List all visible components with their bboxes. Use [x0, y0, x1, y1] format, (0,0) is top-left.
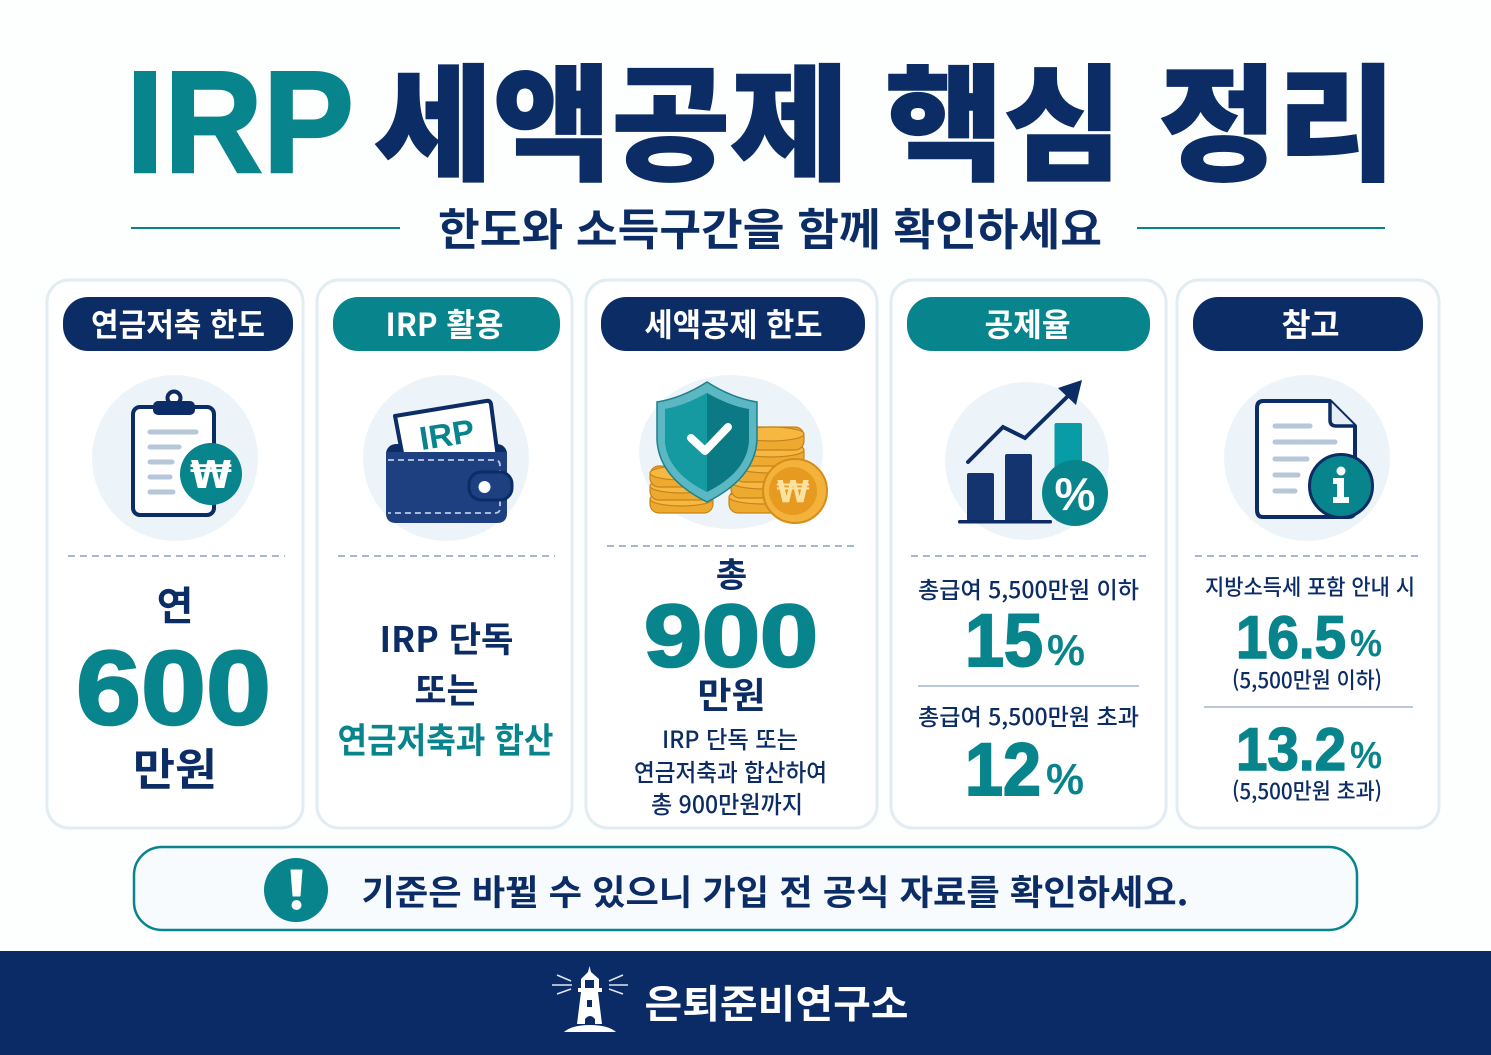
heading pill: 참고 — [1282, 300, 1340, 346]
value: 총 900 만원 — [644, 548, 818, 719]
panel: 연금저축 한도 — [47, 280, 303, 828]
panel: IRP 활용 — [317, 280, 572, 828]
coin stack: left — [650, 466, 713, 513]
panel: 참고 — [1177, 280, 1439, 828]
rate: 16.5%: 지방소득세 포함 안내 시 — [1205, 570, 1415, 602]
heading pill: 세액공제 한도 — [644, 300, 822, 346]
heading pill — [1193, 297, 1423, 351]
rate: 13.2%: 13.2 — [1236, 716, 1346, 783]
rate: 5,500만원 초과 12%: % — [1046, 755, 1084, 804]
title: IRP — [126, 41, 354, 203]
value: 연 600 만원: 연 — [157, 574, 193, 632]
heading pill — [601, 297, 865, 351]
rate: 13.2%: % — [1350, 735, 1382, 777]
callout: notice: 기준은 바뀔 수 있으니 가입 전 공식 자료를 확인하세요. — [362, 865, 1188, 916]
value: 총 900 만원: 만원 — [698, 667, 766, 719]
heading pill: IRP 활용 — [386, 300, 504, 346]
icon: growth chart with percent: % — [1055, 468, 1095, 520]
text: IRP 단독 또는 연금저축과 합산: IRP 단독 — [380, 612, 514, 663]
rate: 5,500만원 초과 12% — [918, 698, 1139, 811]
value: 연 600 만원 — [76, 574, 271, 798]
heading pill — [333, 297, 560, 351]
text: IRP 단독 또는 연금저축과 합산: 연금저축과 합산 — [338, 713, 554, 764]
callout: notice — [134, 847, 1357, 930]
rate: 13.2% — [1232, 716, 1382, 806]
text: 설명 — [634, 720, 827, 820]
rate: 5,500만원 이하 15%: 총급여 5,500만원 이하 — [918, 571, 1139, 605]
footer — [0, 951, 1491, 1055]
rate: 5,500만원 이하 15%: % — [1047, 626, 1085, 675]
title: 세액공제 핵심 정리 — [374, 25, 1396, 207]
heading pill — [63, 297, 293, 351]
heading pill: 연금저축 한도 — [91, 300, 265, 346]
icon: wallet with IRP card — [363, 375, 529, 541]
rate: 16.5%: (5,500만원 이하) — [1232, 663, 1382, 695]
value: 연 600 만원: 600 — [76, 630, 271, 747]
icon: shield and coins — [639, 375, 827, 529]
icon: document with info — [1224, 375, 1390, 541]
rate: 16.5%: % — [1350, 623, 1382, 665]
rate: 5,500만원 이하 15%: 15 — [965, 599, 1043, 682]
icon: lighthouse — [552, 966, 628, 1032]
rate: 5,500만원 이하 15% — [918, 571, 1139, 682]
panel: 공제율 — [891, 280, 1166, 828]
icon: shield and coins: ₩ — [776, 475, 810, 510]
value: 총 900 만원: 900 — [644, 586, 818, 685]
rate: 5,500만원 초과 12%: 12 — [965, 728, 1041, 811]
text: 설명: IRP 단독 또는 — [662, 720, 798, 755]
coin stack: right — [729, 427, 804, 513]
value: 총 900 만원: 총 — [716, 548, 747, 597]
rate: 13.2%: (5,500만원 초과) — [1232, 774, 1382, 806]
panel: 세액공제 한도 — [586, 280, 877, 828]
value: 연 600 만원: 만원 — [133, 734, 217, 798]
text: 설명: 연금저축과 합산하여 — [634, 753, 827, 788]
icon: clipboard with won — [92, 375, 258, 541]
icon: growth chart with percent — [945, 380, 1109, 540]
text: IRP 단독 또는 연금저축과 합산 — [338, 612, 554, 764]
icon: clipboard with won: ₩ — [190, 453, 232, 497]
rate: 16.5%: 16.5 — [1236, 604, 1346, 671]
text: IRP 단독 또는 연금저축과 합산: 또는 — [414, 663, 478, 714]
brand name: 은퇴준비연구소 — [644, 974, 908, 1030]
rate: 5,500만원 초과 12%: 총급여 5,500만원 초과 — [918, 698, 1139, 732]
icon: wallet with IRP card: IRP — [417, 412, 477, 457]
subtitle: 한도와 소득구간을 함께 확인하세요 — [438, 194, 1102, 258]
heading pill: 공제율 — [984, 300, 1070, 346]
heading pill — [907, 297, 1150, 351]
rate: 16.5% — [1205, 570, 1415, 695]
text: 설명: 총 900만원까지 — [651, 785, 803, 820]
